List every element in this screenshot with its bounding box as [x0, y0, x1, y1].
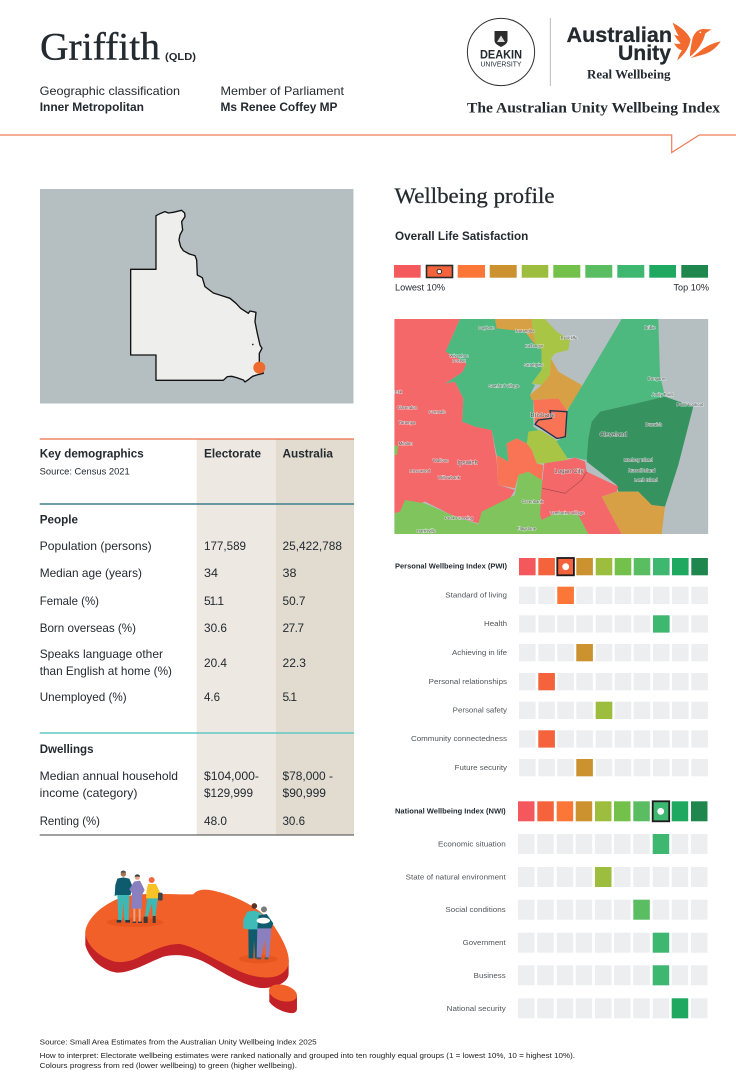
map place labels: Clarendon	[397, 405, 418, 410]
Queensland outline	[131, 210, 263, 382]
map place labels: Rosewood	[410, 469, 431, 474]
map place labels: Wivenhoe	[449, 353, 469, 358]
row: social conditions	[445, 900, 708, 920]
icon: kookaburra	[673, 23, 721, 60]
chart: Personal Wellbeing Index grid	[395, 558, 708, 776]
map place labels: Peak Crossing	[445, 516, 474, 521]
table heading row: Australia	[282, 447, 333, 461]
map place labels: Bribie	[644, 325, 656, 330]
row: community connectedness: Community connectedness	[411, 734, 507, 743]
row: state of natural environment	[406, 867, 708, 887]
section: people: 20.4	[204, 656, 227, 670]
row: state of natural environment: State of natural environment	[406, 872, 507, 882]
logo: Deakin University: DEAKIN	[480, 50, 522, 62]
section: people: than English at home (%)	[40, 664, 172, 678]
map place labels: Kallangur	[525, 344, 544, 349]
member of parliament: Member of Parliament	[220, 84, 345, 98]
scale labels: Top 10%	[674, 283, 710, 294]
section: people: 177,589	[204, 539, 246, 553]
map place labels: Ipswich	[457, 460, 478, 467]
row: health	[484, 615, 708, 633]
section: dwellings: $104,000-	[204, 769, 259, 783]
section: dwellings: $78,000 -	[282, 769, 333, 783]
row: achieving in life	[452, 644, 708, 661]
row: economic situation: Economic situation	[438, 840, 506, 848]
map place labels: Dunwich	[645, 422, 663, 427]
electorate location marker	[253, 362, 265, 374]
map place labels: Cleveland	[600, 432, 628, 439]
row: economic situation	[438, 834, 708, 854]
section: people: Population (persons)	[40, 539, 152, 553]
map place labels: Russell Island	[628, 468, 656, 473]
map place labels: Tamborine Village	[550, 510, 585, 515]
row: achieving in life: Achieving in life	[452, 648, 507, 657]
footer notes	[40, 1038, 575, 1070]
logo: Australian Unity: Real Wellbeing	[587, 66, 671, 82]
scale labels	[395, 283, 710, 294]
geographic classification: Inner Metropolitan	[40, 100, 144, 114]
section: people: 38	[282, 566, 297, 580]
map place labels: Narangba	[515, 328, 535, 333]
section: people: Female (%)	[40, 594, 99, 608]
header: electorate title block	[40, 26, 345, 114]
section: dwellings	[40, 742, 333, 828]
section: dwellings: 30.6	[282, 814, 305, 828]
map place labels: Esk	[395, 389, 403, 394]
map place labels: Tarampa	[399, 420, 416, 425]
table heading row: Key demographics	[40, 447, 144, 461]
row: personal relationships: Personal relationships	[429, 677, 507, 686]
section: people: Median age (years)	[40, 566, 142, 580]
section: people: Speaks language other	[40, 647, 163, 661]
map: electorates around Brisbane	[394, 319, 708, 534]
row: social conditions: Social conditions	[445, 905, 506, 914]
row: business	[474, 965, 708, 985]
section: people: Born overseas (%)	[40, 621, 136, 635]
map place labels	[395, 325, 704, 533]
PWI header row: Personal Wellbeing Index (PWI)	[395, 561, 507, 570]
row: future security: Future security	[455, 763, 507, 772]
header rule with speech tail	[0, 135, 736, 152]
panel: key demographics table	[40, 439, 354, 835]
section: people: People	[40, 513, 78, 527]
Australia landmass	[85, 890, 299, 1013]
people group right	[243, 903, 273, 959]
row: government	[463, 933, 708, 953]
section: people: Unemployed (%)	[40, 690, 127, 704]
geographic classification	[40, 84, 180, 114]
row: government: Government	[463, 938, 507, 947]
title: Griffith	[40, 26, 160, 68]
member of parliament	[220, 84, 345, 114]
map place labels: Greenbank	[522, 499, 544, 504]
map place labels: Redcliffe	[561, 335, 578, 340]
subheading: overall life satisfaction: Overall Life Satisfaction	[395, 229, 528, 243]
row: national security: National security	[447, 1004, 506, 1013]
map place labels: Flagstone	[517, 526, 537, 531]
section: people	[40, 513, 342, 704]
section: dwellings: $90,999	[282, 786, 326, 800]
logo: Australian Unity: Unity	[618, 42, 671, 65]
panel: locator map of Queensland	[40, 189, 354, 404]
row: standard of living	[445, 587, 708, 604]
row: national security	[447, 998, 708, 1018]
section: people: 51.1	[204, 594, 224, 608]
section: people: 5.1	[282, 690, 297, 704]
map place labels: Samford Village	[489, 383, 520, 388]
map place labels: Brisbane	[530, 412, 555, 419]
map place labels: Dayboro	[478, 325, 495, 330]
section: people: 4.6	[204, 690, 220, 704]
section: dwellings: income (category)	[40, 786, 138, 800]
map place labels: Harrisville	[417, 528, 436, 533]
section: people: 22.3	[282, 656, 306, 670]
heading: wellbeing profile: Wellbeing profile	[394, 183, 555, 208]
map place labels: Pocket	[452, 359, 466, 364]
section: dwellings: Dwellings	[40, 742, 94, 756]
scale: overall life satisfaction rating	[394, 265, 710, 294]
row: community connectedness	[411, 730, 708, 748]
row: personal safety: Personal safety	[453, 706, 507, 714]
section: people: 27.7	[282, 621, 304, 635]
map place labels: Amity Point	[652, 392, 674, 397]
NWI header row	[395, 801, 708, 821]
row: future security	[455, 759, 708, 776]
PWI header row	[395, 558, 708, 575]
map place labels: Logan City	[554, 468, 585, 475]
map place labels: Point Lookout	[677, 402, 704, 407]
row: health: Health	[484, 619, 507, 628]
row: personal safety	[453, 702, 708, 719]
section: dwellings: 48.0	[204, 814, 227, 828]
footer notes: How to interpret: Electorate wellbeing estimates were ranked nationally and grouped into ten roughly equal groups (1 = lowest 10%, 10 = highest 10%).	[40, 1051, 575, 1060]
illustration: people on map of Australia	[85, 871, 299, 1013]
table heading row: Electorate	[204, 447, 261, 461]
section: people: 30.6	[204, 621, 227, 635]
logo: Deakin University	[467, 18, 535, 86]
logo: Australian Unity: Australian	[566, 24, 672, 47]
section: dwellings: Renting (%)	[40, 814, 100, 828]
section: dwellings: Median annual household	[40, 769, 178, 783]
scale labels: Lowest 10%	[395, 283, 446, 294]
people group left	[115, 871, 163, 923]
section: dwellings: $129,999	[204, 786, 253, 800]
map place labels: Fernvale	[429, 409, 446, 414]
map place labels: Minden	[399, 441, 413, 446]
table heading row	[40, 447, 333, 476]
NWI header row: National Wellbeing Index (NWI)	[395, 806, 506, 815]
table heading row: Source: Census 2021	[40, 466, 130, 476]
geographic classification: Geographic classification	[40, 84, 180, 98]
map place labels: Bongaree	[648, 376, 667, 381]
row: business: Business	[474, 971, 506, 980]
chart: National Wellbeing Index grid	[395, 801, 708, 1018]
section: people: 34	[204, 566, 218, 580]
footer notes: Colours progress from red (lower wellbeing) to green (higher wellbeing).	[40, 1061, 297, 1070]
logo: Deakin University: UNIVERSITY	[480, 62, 522, 68]
row: standard of living: Standard of living	[445, 590, 507, 600]
section: people: 25,422,788	[282, 539, 342, 553]
map place labels: Willowbank	[438, 475, 461, 480]
Griffith electorate outline	[535, 411, 567, 438]
footer notes: Source: Small Area Estimates from the Australian Unity Wellbeing Index 2025	[40, 1038, 317, 1046]
logo: Australian Unity	[566, 23, 721, 82]
map place labels: Strathpine	[524, 362, 544, 367]
section: people: 50.7	[282, 594, 306, 608]
map place labels: Macleay Island	[624, 457, 653, 462]
map place labels: Lamb Island	[634, 478, 658, 483]
state tag: (QLD)	[165, 51, 196, 63]
index name: The Australian Unity Wellbeing Index	[467, 100, 721, 116]
map place labels: Walloon	[433, 458, 449, 463]
member of parliament: Ms Renee Coffey MP	[220, 100, 338, 114]
row: personal relationships	[429, 673, 708, 690]
